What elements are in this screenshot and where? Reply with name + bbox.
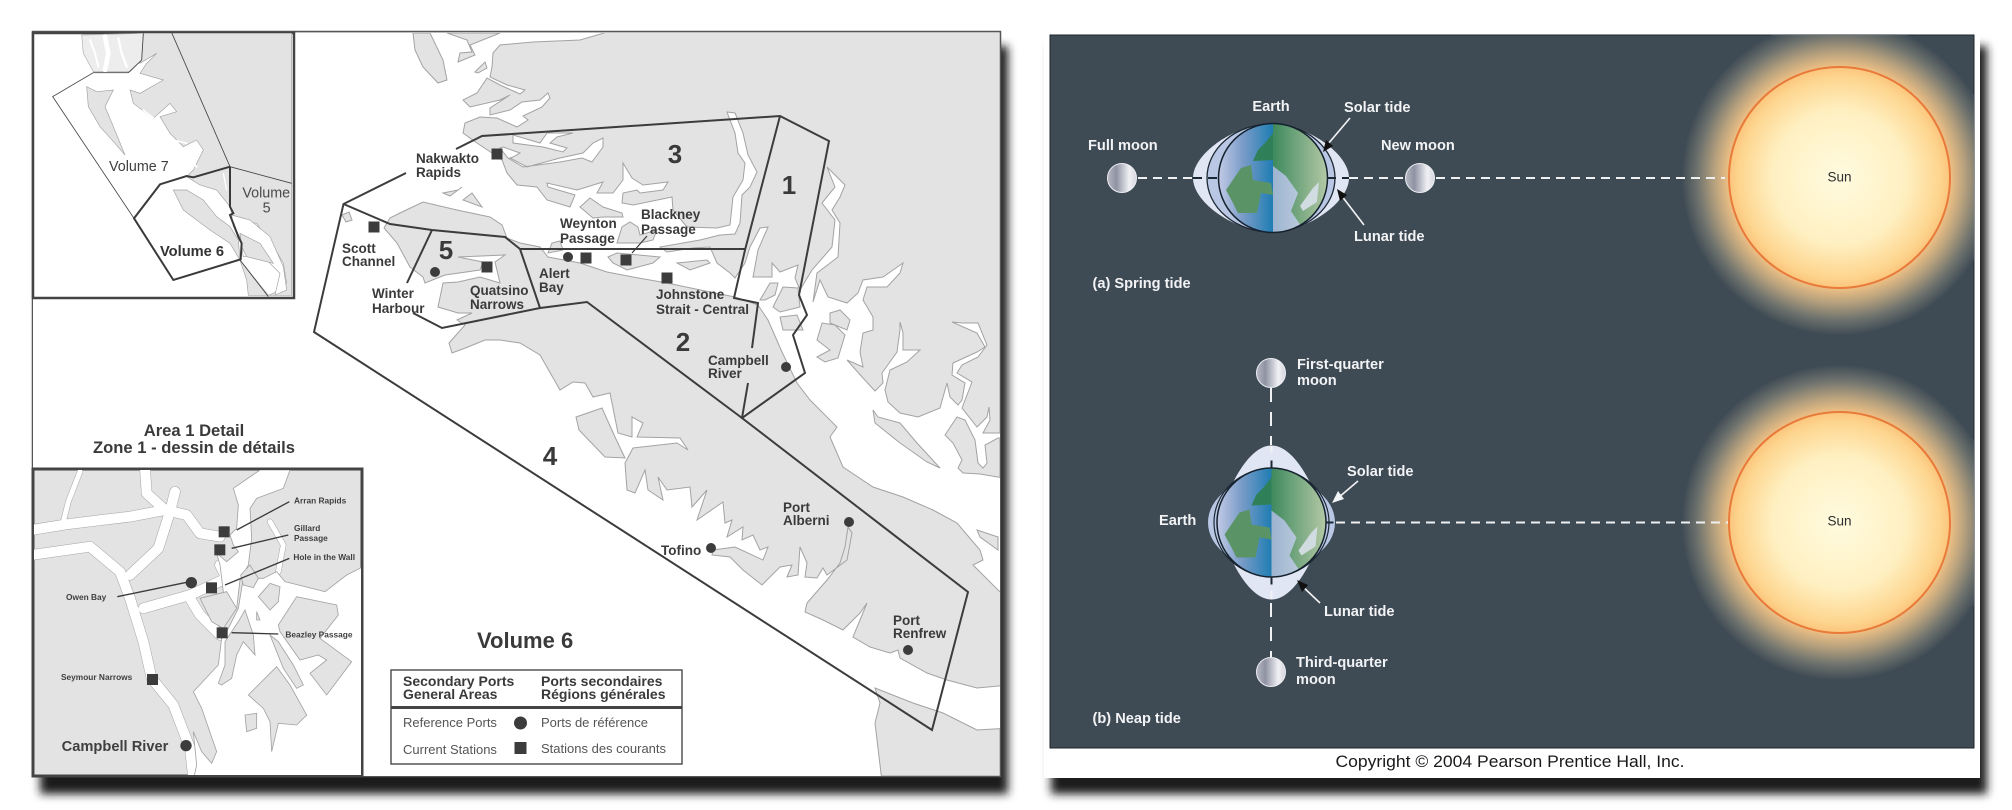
zone numbers bbox=[439, 139, 796, 471]
sun: neap tide bbox=[1682, 364, 1998, 680]
earth with neap tide bulges bbox=[1208, 446, 1335, 600]
spring tide labels: (a) Spring tide bbox=[1092, 276, 1191, 292]
detail labels: Seymour Narrows bbox=[61, 672, 133, 682]
place labels: Blackney bbox=[641, 207, 701, 222]
detail sea bbox=[193, 565, 367, 780]
spring tide labels bbox=[1088, 99, 1455, 292]
panel: spring and neap tides bbox=[1044, 20, 1998, 794]
inset: volume index map bbox=[33, 33, 294, 298]
place labels: Alberni bbox=[783, 513, 830, 528]
place labels: Scott bbox=[342, 241, 376, 256]
arrow: spring solar tide bbox=[1323, 118, 1350, 152]
inlets bbox=[500, 133, 603, 167]
spring tide labels: Lunar tide bbox=[1354, 229, 1425, 245]
inset labels bbox=[109, 159, 290, 260]
inset labels: Volume 6 bbox=[160, 244, 224, 260]
place labels: Renfrew bbox=[893, 626, 947, 641]
place labels: Rapids bbox=[416, 165, 461, 180]
place labels: Bay bbox=[539, 280, 564, 295]
earth with spring tide bulges bbox=[1193, 123, 1349, 233]
legend: Current Stations bbox=[403, 742, 497, 757]
legend: Reference Ports bbox=[403, 715, 497, 730]
arrow: neap solar tide bbox=[1332, 481, 1358, 503]
legend bbox=[391, 670, 682, 764]
zone numbers: 1 bbox=[782, 170, 796, 200]
legend: Ports de référence bbox=[541, 715, 648, 730]
sun: spring tide bbox=[1684, 35, 1974, 333]
place labels: Channel bbox=[342, 254, 395, 269]
zone boundaries bbox=[314, 116, 968, 730]
panel: Volume 6 map bbox=[20, 20, 1010, 794]
inset land bbox=[82, 33, 292, 295]
place labels: Strait - Central bbox=[656, 302, 749, 317]
neap tide labels: Third-quarter bbox=[1296, 655, 1388, 671]
neap tide alignment lines bbox=[1271, 388, 1728, 657]
legend: Secondary Ports bbox=[403, 673, 514, 689]
place labels: Alert bbox=[539, 266, 570, 281]
detail labels: Arran Rapids bbox=[294, 495, 347, 505]
detail leader lines bbox=[117, 502, 289, 634]
copyright line: Copyright © 2004 Pearson Prentice Hall, Inc. bbox=[1336, 752, 1684, 771]
place labels bbox=[342, 151, 947, 641]
moons: full and new bbox=[1108, 164, 1434, 192]
title: Volume 6: Volume 6 bbox=[477, 628, 573, 653]
place labels: Quatsino bbox=[470, 283, 529, 298]
neap tide labels: moon bbox=[1296, 672, 1336, 688]
detail islands bbox=[200, 565, 352, 752]
detail labels: Campbell River bbox=[62, 739, 169, 755]
zone numbers: 5 bbox=[439, 235, 453, 265]
spring tide alignment line bbox=[1138, 177, 1725, 179]
legend: Ports secondaires bbox=[541, 673, 663, 689]
legend: General Areas bbox=[403, 686, 498, 702]
place labels: Port bbox=[893, 613, 921, 628]
zone numbers: 2 bbox=[676, 327, 690, 357]
inset labels: Volume 7 bbox=[109, 159, 169, 175]
place labels: Winter bbox=[372, 286, 415, 301]
sun: spring tide: Sun bbox=[1827, 170, 1852, 184]
spring tide labels: New moon bbox=[1381, 138, 1455, 154]
neap tide labels bbox=[1092, 357, 1414, 727]
place labels: Weynton bbox=[560, 216, 617, 231]
inset: area 1 detail map bbox=[27, 468, 367, 780]
neap tide labels: Solar tide bbox=[1347, 464, 1414, 480]
arrow: neap lunar tide bbox=[1297, 580, 1320, 603]
place labels: Nakwakto bbox=[416, 151, 479, 166]
place labels: Passage bbox=[641, 222, 696, 237]
place labels: Port bbox=[783, 500, 811, 515]
place labels: Harbour bbox=[372, 301, 425, 316]
detail labels: Beazley Passage bbox=[285, 630, 353, 640]
detail labels: Passage bbox=[294, 533, 328, 543]
heading: area 1 detail bbox=[93, 421, 295, 457]
neap tide labels: Earth bbox=[1159, 513, 1196, 529]
place labels: Tofino bbox=[661, 543, 701, 558]
current station and reference port markers bbox=[368, 148, 913, 655]
place labels: Narrows bbox=[470, 297, 524, 312]
spring tide labels: Full moon bbox=[1088, 138, 1158, 154]
place labels: Passage bbox=[560, 231, 615, 246]
detail channels bbox=[27, 468, 283, 778]
spring tide labels: Earth bbox=[1252, 99, 1290, 115]
inset boundaries bbox=[53, 33, 292, 297]
detail markers bbox=[147, 526, 230, 751]
arrow: spring lunar tide bbox=[1337, 189, 1364, 225]
detail labels: Owen Bay bbox=[66, 592, 107, 602]
neap tide labels: Lunar tide bbox=[1324, 604, 1395, 620]
sun: neap tide: Sun bbox=[1827, 514, 1852, 528]
inset labels: 5 bbox=[263, 201, 271, 217]
place labels: Campbell bbox=[708, 353, 769, 368]
place labels: Johnstone bbox=[656, 287, 725, 302]
moons: first and third quarter bbox=[1256, 358, 1286, 686]
zone numbers: 4 bbox=[543, 441, 558, 471]
zone numbers: 3 bbox=[668, 139, 682, 169]
detail labels: Hole in the Wall bbox=[293, 552, 355, 562]
heading: area 1 detail: Area 1 Detail bbox=[144, 421, 244, 440]
place labels: River bbox=[708, 366, 743, 381]
neap tide labels: moon bbox=[1297, 373, 1337, 389]
map: coastlines of the main map bbox=[20, 20, 1010, 790]
detail labels: Gillard bbox=[294, 523, 320, 533]
legend: Stations des courants bbox=[541, 741, 667, 756]
neap tide labels: (b) Neap tide bbox=[1092, 711, 1181, 727]
detail labels bbox=[61, 495, 355, 755]
heading: area 1 detail: Zone 1 - dessin de détails bbox=[93, 438, 295, 457]
legend: Régions générales bbox=[541, 686, 666, 702]
inset labels: Volume bbox=[242, 186, 290, 202]
islands bbox=[342, 33, 998, 550]
neap tide labels: First-quarter bbox=[1297, 357, 1384, 373]
spring tide labels: Solar tide bbox=[1344, 100, 1410, 116]
